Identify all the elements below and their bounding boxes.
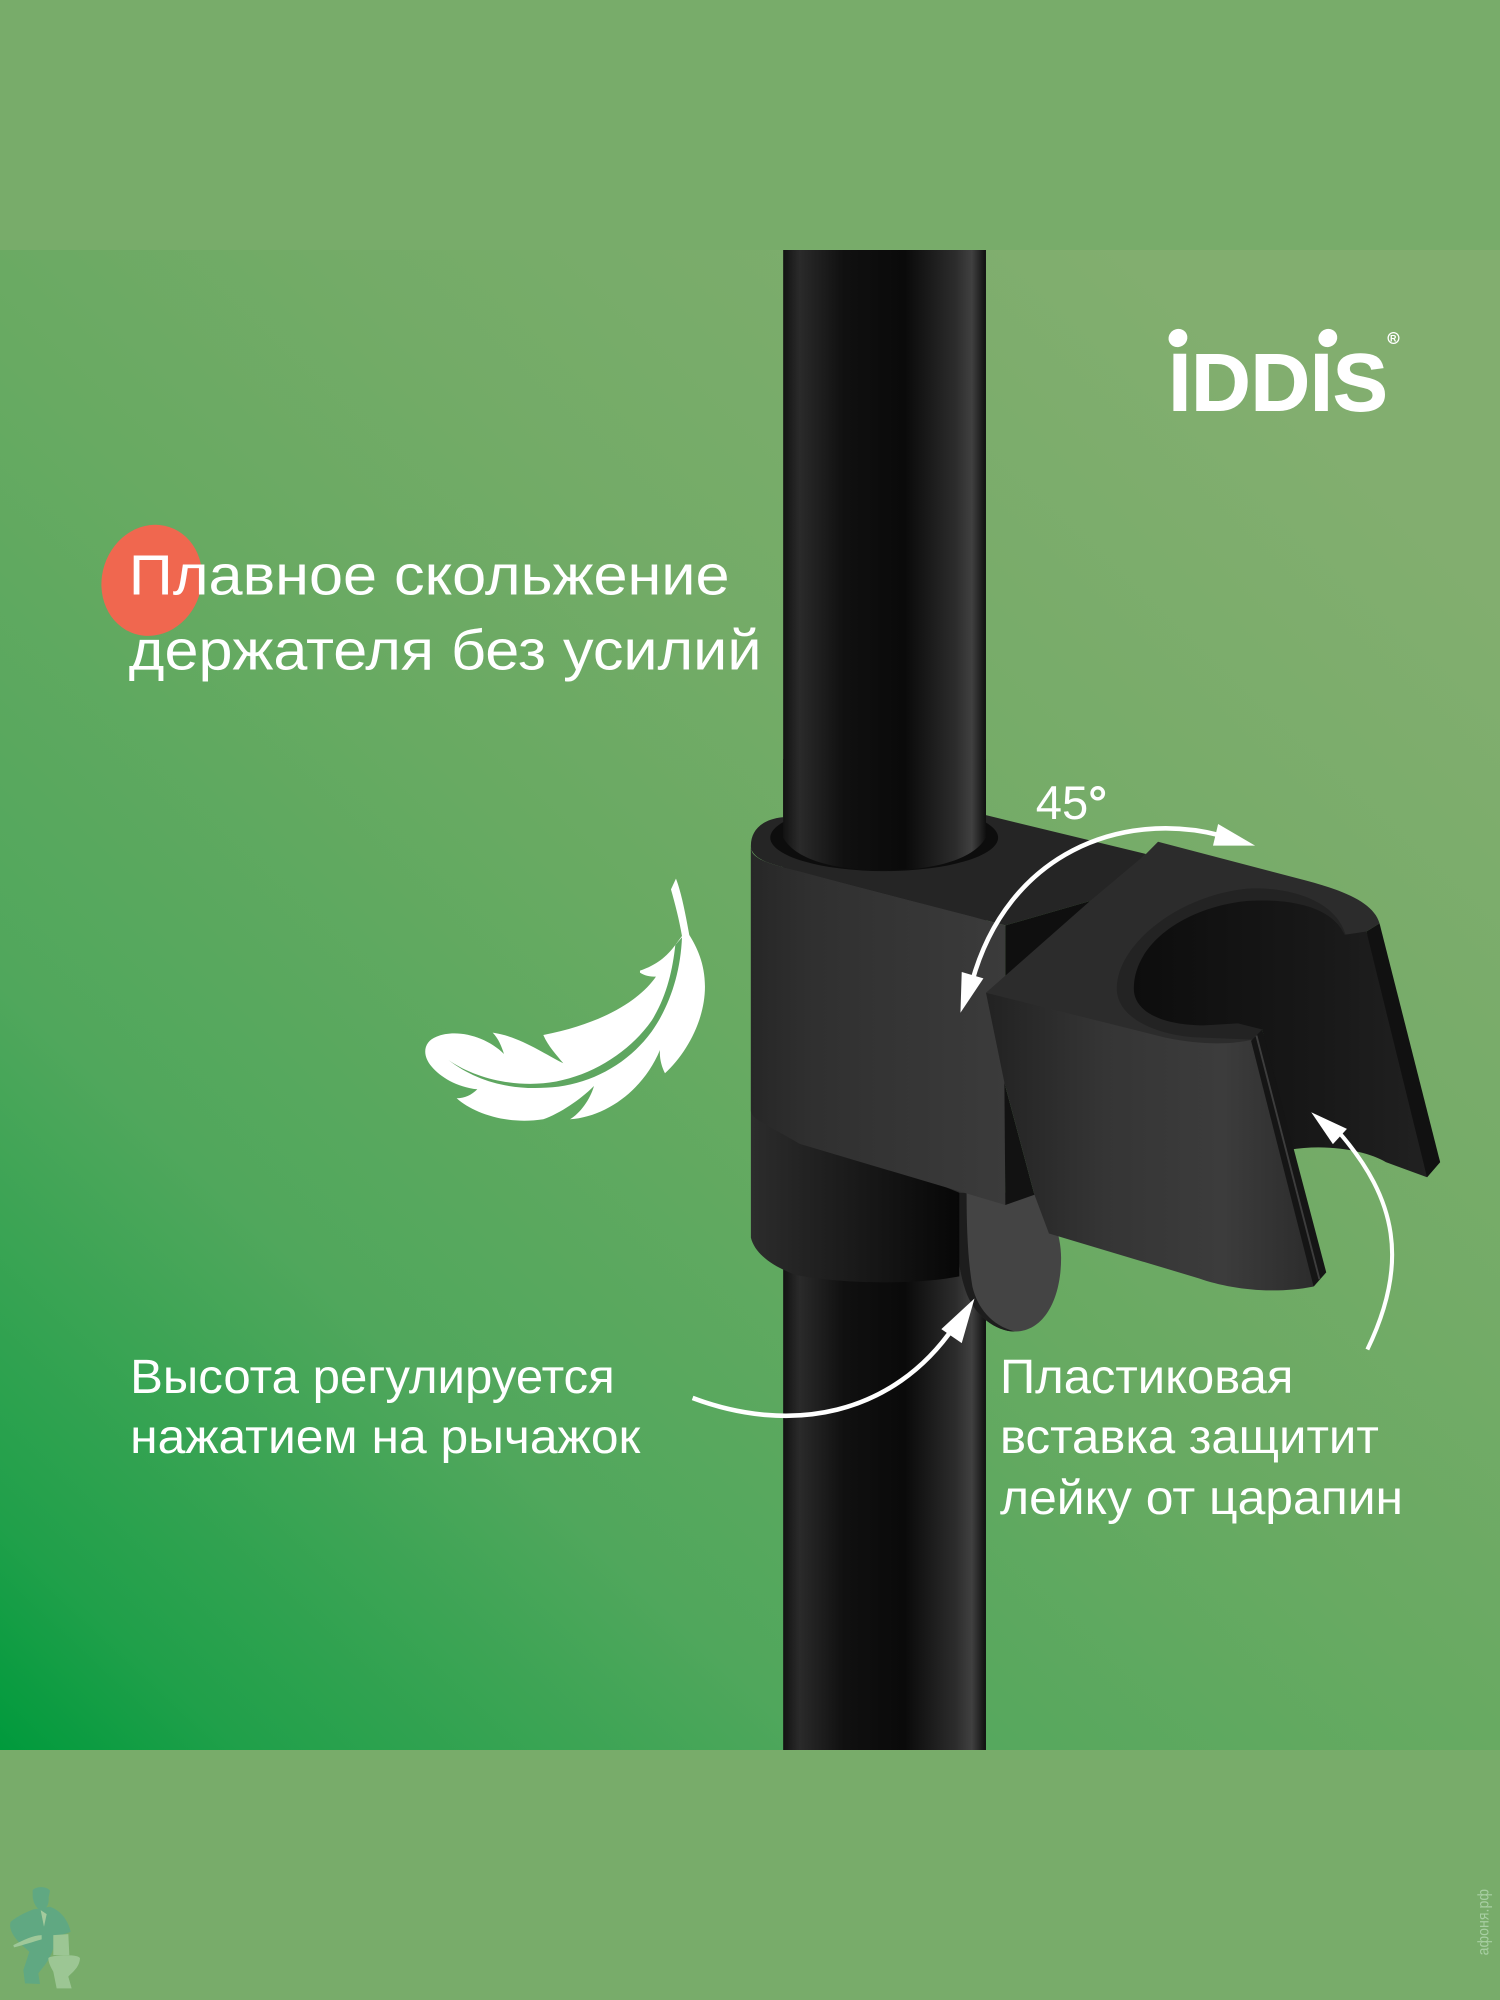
clamp hole	[770, 804, 998, 871]
clamp lower cylinder	[751, 846, 959, 1282]
caption: plastic insert: вставка защитит	[1000, 1410, 1379, 1464]
caption: lever: Высота регулируется	[130, 1350, 615, 1404]
red accent blob	[87, 512, 216, 649]
caption: plastic insert	[1000, 1350, 1403, 1525]
caption: lever	[130, 1350, 641, 1464]
shower holder product	[751, 759, 1440, 1332]
holder rim	[1117, 888, 1346, 1040]
watermark: plumber with toilet	[10, 1887, 80, 1988]
caption: plastic insert: Пластиковая	[1000, 1350, 1293, 1404]
brand logo: R	[1390, 333, 1397, 343]
holder right edge strip	[1366, 923, 1440, 1177]
hinge wedge	[1004, 1083, 1034, 1205]
clamp shadow wedge	[991, 899, 1102, 995]
holder front edge strip	[1251, 1029, 1326, 1287]
holder top face	[986, 842, 1380, 1050]
shower rail pole	[783, 250, 986, 1750]
upper pole entering clamp	[783, 759, 986, 870]
holder inner surface	[1134, 900, 1440, 1177]
holder front flap	[986, 993, 1325, 1290]
watermark: site name: афоня.рф	[1476, 1889, 1493, 1955]
clamp top face	[751, 815, 1146, 925]
arrow: 45 degree rotation	[960, 824, 1255, 1013]
arrow: plastic insert	[1311, 1112, 1392, 1349]
heading: Плавное скольжение	[129, 544, 730, 607]
heading	[129, 544, 761, 683]
background: central gradient panel	[0, 250, 1500, 1750]
label: 45 degrees: 45°	[1036, 777, 1107, 830]
lever	[954, 1193, 1061, 1332]
caption: lever: нажатием на рычажок	[130, 1410, 641, 1464]
arrow: lever	[693, 1298, 974, 1416]
icon: feather	[425, 879, 705, 1121]
brand logo: IDDIS	[1168, 338, 1388, 429]
heading: держателя без усилий	[129, 620, 761, 683]
caption: plastic insert: лейку от царапин	[1000, 1471, 1403, 1525]
clamp front face	[751, 848, 1005, 1205]
holder edge highlight	[1256, 1036, 1319, 1279]
